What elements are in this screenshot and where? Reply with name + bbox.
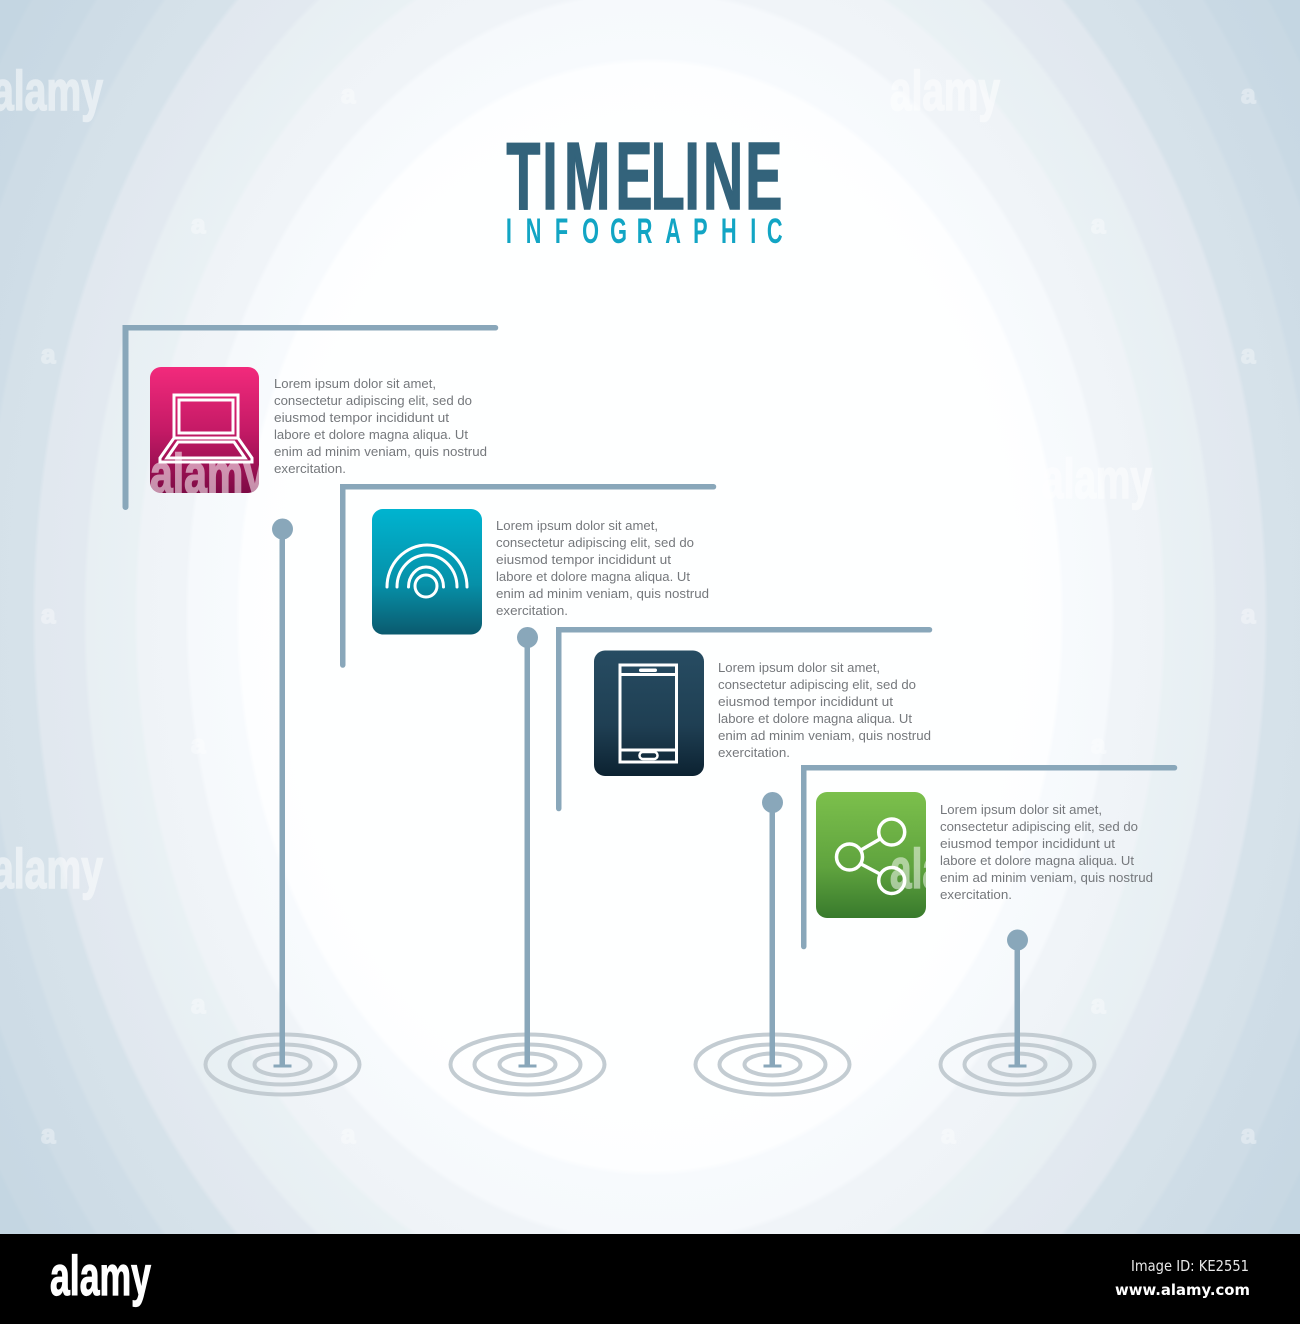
background watermarks: a bbox=[191, 989, 206, 1019]
text block: step 2: exercitation. bbox=[496, 603, 568, 618]
text block: step 2: Lorem ipsum dolor sit amet, bbox=[496, 518, 658, 533]
background watermarks: a bbox=[41, 339, 56, 369]
text block: step 2 bbox=[496, 518, 709, 618]
background watermarks: alamy bbox=[1042, 447, 1152, 510]
text block: step 4: exercitation. bbox=[940, 887, 1012, 902]
icon: share nodes: alamy bbox=[890, 837, 1000, 900]
text block: step 1: labore et dolore magna aliqua. Ut bbox=[274, 427, 468, 442]
background watermarks: a bbox=[1091, 989, 1106, 1019]
text block: step 2: consectetur adipiscing elit, sed do bbox=[496, 535, 694, 550]
footer logo: alamy bbox=[50, 1244, 151, 1307]
footer bar bbox=[0, 1234, 1300, 1324]
text block: step 3: labore et dolore magna aliqua. Ut bbox=[718, 711, 912, 726]
text block: step 1: exercitation. bbox=[274, 461, 346, 476]
text block: step 3: consectetur adipiscing elit, sed do bbox=[718, 677, 916, 692]
text block: step 3: enim ad minim veniam, quis nostrud bbox=[718, 728, 931, 743]
heading: TIMELINE: TIMELINE bbox=[506, 122, 782, 230]
background watermarks: a bbox=[341, 79, 356, 109]
background watermarks: a bbox=[641, 1119, 656, 1149]
background watermarks: a bbox=[191, 729, 206, 759]
text block: step 1: Lorem ipsum dolor sit amet, bbox=[274, 376, 436, 391]
text block: step 1: consectetur adipiscing elit, sed do bbox=[274, 393, 472, 408]
icon: laptop bbox=[150, 367, 259, 493]
text block: step 2: labore et dolore magna aliqua. Ut bbox=[496, 569, 690, 584]
background watermarks: a bbox=[641, 79, 656, 109]
timeline target 1 bbox=[206, 518, 360, 1094]
text block: step 1 bbox=[274, 376, 487, 476]
text block: step 1: eiusmod tempor incididunt ut bbox=[274, 410, 449, 425]
text block: step 4: enim ad minim veniam, quis nostrud bbox=[940, 870, 1153, 885]
text block: step 3: eiusmod tempor incididunt ut bbox=[718, 694, 893, 709]
background watermarks: a bbox=[1241, 1119, 1256, 1149]
background watermarks: a bbox=[1091, 729, 1106, 759]
text block: step 4 bbox=[940, 802, 1153, 902]
background watermarks: a bbox=[1241, 339, 1256, 369]
background watermarks: a bbox=[1241, 599, 1256, 629]
website: www.alamy.com bbox=[1115, 1281, 1250, 1299]
title bbox=[506, 122, 783, 251]
text block: step 3: Lorem ipsum dolor sit amet, bbox=[718, 660, 880, 675]
panel: step 4 share bbox=[801, 765, 1177, 949]
background watermarks bbox=[0, 59, 1256, 1149]
text block: step 2: enim ad minim veniam, quis nostrud bbox=[496, 586, 709, 601]
image id: Image ID: KE2551 bbox=[1131, 1257, 1249, 1275]
text block: step 4: consectetur adipiscing elit, sed do bbox=[940, 819, 1138, 834]
text block: step 3: exercitation. bbox=[718, 745, 790, 760]
text block: step 4: labore et dolore magna aliqua. Ut bbox=[940, 853, 1134, 868]
background watermarks: a bbox=[191, 209, 206, 239]
icon: wifi signal bbox=[372, 509, 482, 634]
background watermarks: a bbox=[941, 1119, 956, 1149]
panel: step 3 smartphone bbox=[556, 627, 932, 811]
text block: step 3 bbox=[718, 660, 931, 760]
background watermarks: a bbox=[1091, 209, 1106, 239]
background watermarks: a bbox=[341, 1119, 356, 1149]
panel: step 1 laptop bbox=[122, 325, 498, 510]
background watermarks: alamy bbox=[890, 59, 1000, 122]
background watermarks: a bbox=[41, 599, 56, 629]
timeline target 4 bbox=[940, 930, 1094, 1094]
panel: step 2 wifi bbox=[340, 484, 716, 668]
subheading: INFOGRAPHIC: INFOGRAPHIC bbox=[506, 213, 783, 251]
timeline target 3 bbox=[696, 792, 850, 1094]
icon: smartphone bbox=[594, 650, 704, 776]
text block: step 4: eiusmod tempor incididunt ut bbox=[940, 836, 1115, 851]
text block: step 2: eiusmod tempor incididunt ut bbox=[496, 552, 671, 567]
background watermarks: a bbox=[41, 1119, 56, 1149]
text block: step 4: Lorem ipsum dolor sit amet, bbox=[940, 802, 1102, 817]
icon: laptop: alamy bbox=[150, 442, 266, 505]
icon: share nodes bbox=[816, 792, 926, 918]
timeline target 2 bbox=[450, 627, 604, 1094]
background watermarks: a bbox=[1241, 79, 1256, 109]
text block: step 1: enim ad minim veniam, quis nostrud bbox=[274, 444, 487, 459]
